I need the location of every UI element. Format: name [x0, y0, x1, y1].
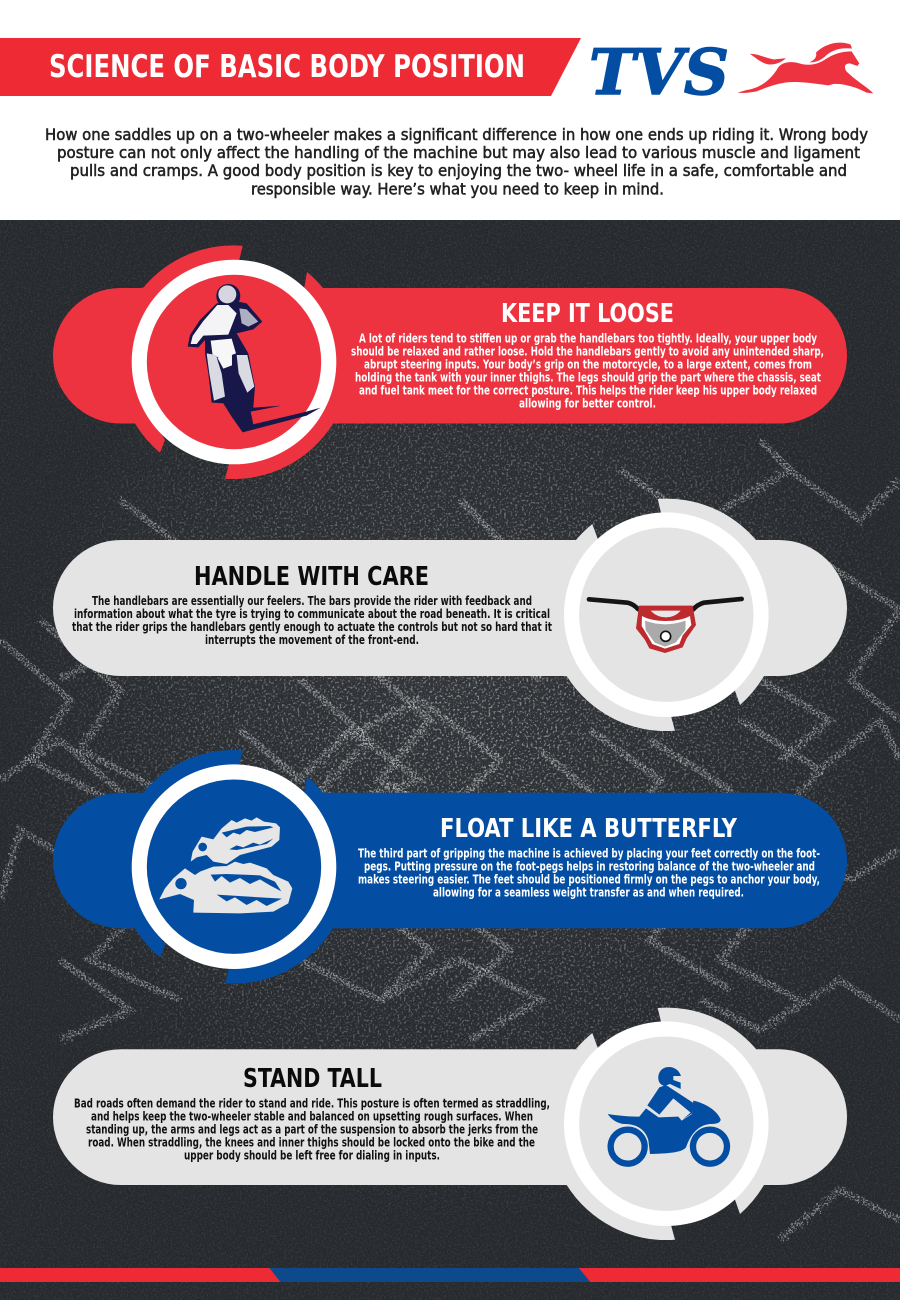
panel: stand tall [53, 1008, 847, 1240]
white ring [132, 764, 336, 969]
icon: handlebars [589, 599, 742, 653]
body text [351, 332, 824, 411]
intro paragraph: How one saddles up on a two-wheeler makes a significant difference in how one ends up riding it. Wrong body [45, 125, 868, 144]
body text: and helps keep the two-wheeler stable and balanced on upsetting rough surfaces. When [91, 1109, 533, 1123]
white ring [132, 260, 336, 464]
pill and ring arcs [53, 245, 847, 479]
body text: The handlebars are essentially our feelers. The bars provide the rider with feedback and [92, 594, 532, 608]
footer stripe [0, 1268, 900, 1282]
header banner [0, 38, 581, 96]
panel: float like a butterfly [53, 750, 847, 984]
body text [72, 594, 552, 647]
white ring [564, 1021, 769, 1226]
heading: HANDLE WITH CARE [194, 562, 429, 592]
body text: road. When straddling, the knees and inner thighs should be locked onto the bike and the [88, 1135, 535, 1149]
intro paragraph [45, 125, 868, 198]
intro paragraph: pulls and cramps. A good body position is key to enjoying the two- wheel life in a safe, comfortable and [70, 161, 847, 180]
intro paragraph: posture can not only affect the handling of the machine but may also lead to various muscle and ligament [57, 143, 860, 162]
pill and ring arcs [53, 1008, 847, 1240]
pill and ring arcs [53, 750, 847, 984]
body text [358, 846, 820, 900]
body text: standing up, the arms and legs act as a part of the suspension to absorb the jerks from the [86, 1122, 538, 1136]
logo: TVS wordmark and horse: TVS [589, 35, 729, 109]
body text: allowing for better control. [519, 397, 656, 411]
body text: that the rider grips the handlebars gently enough to actuate the controls but not so hard that it [72, 620, 552, 634]
body text: abrupt steering inputs. Your body’s grip on the motorcycle, to a large extent, comes from [364, 358, 812, 372]
title: SCIENCE OF BASIC BODY POSITION [49, 49, 525, 85]
body text: allowing for a seamless weight transfer as and when required. [433, 886, 744, 900]
logo: TVS wordmark and horse [589, 35, 873, 109]
panel: keep it loose [53, 245, 847, 479]
panel: handle with care [53, 499, 847, 731]
icon: motorcycle rider [608, 1067, 727, 1164]
heading: KEEP IT LOOSE [501, 299, 674, 329]
icon: motocross rider [188, 284, 321, 432]
white page header background [0, 0, 900, 220]
intro paragraph: responsible way. Here’s what you need to keep in mind. [251, 180, 664, 198]
white ring [564, 512, 769, 717]
body text: information about what the tyre is trying to communicate about the road beneath. It is critical [74, 607, 550, 621]
heading: STAND TALL [243, 1064, 382, 1094]
body text: Bad roads often demand the rider to stand and ride. This posture is often termed as straddling, [74, 1096, 550, 1110]
heading: FLOAT LIKE A BUTTERFLY [440, 814, 738, 844]
icon: foot pegs [159, 817, 292, 913]
body text: upper body should be left free for dialing in inputs. [184, 1148, 440, 1162]
body text: interrupts the movement of the front-end. [205, 633, 419, 647]
body text [74, 1096, 550, 1162]
pill and ring arcs [53, 499, 847, 731]
